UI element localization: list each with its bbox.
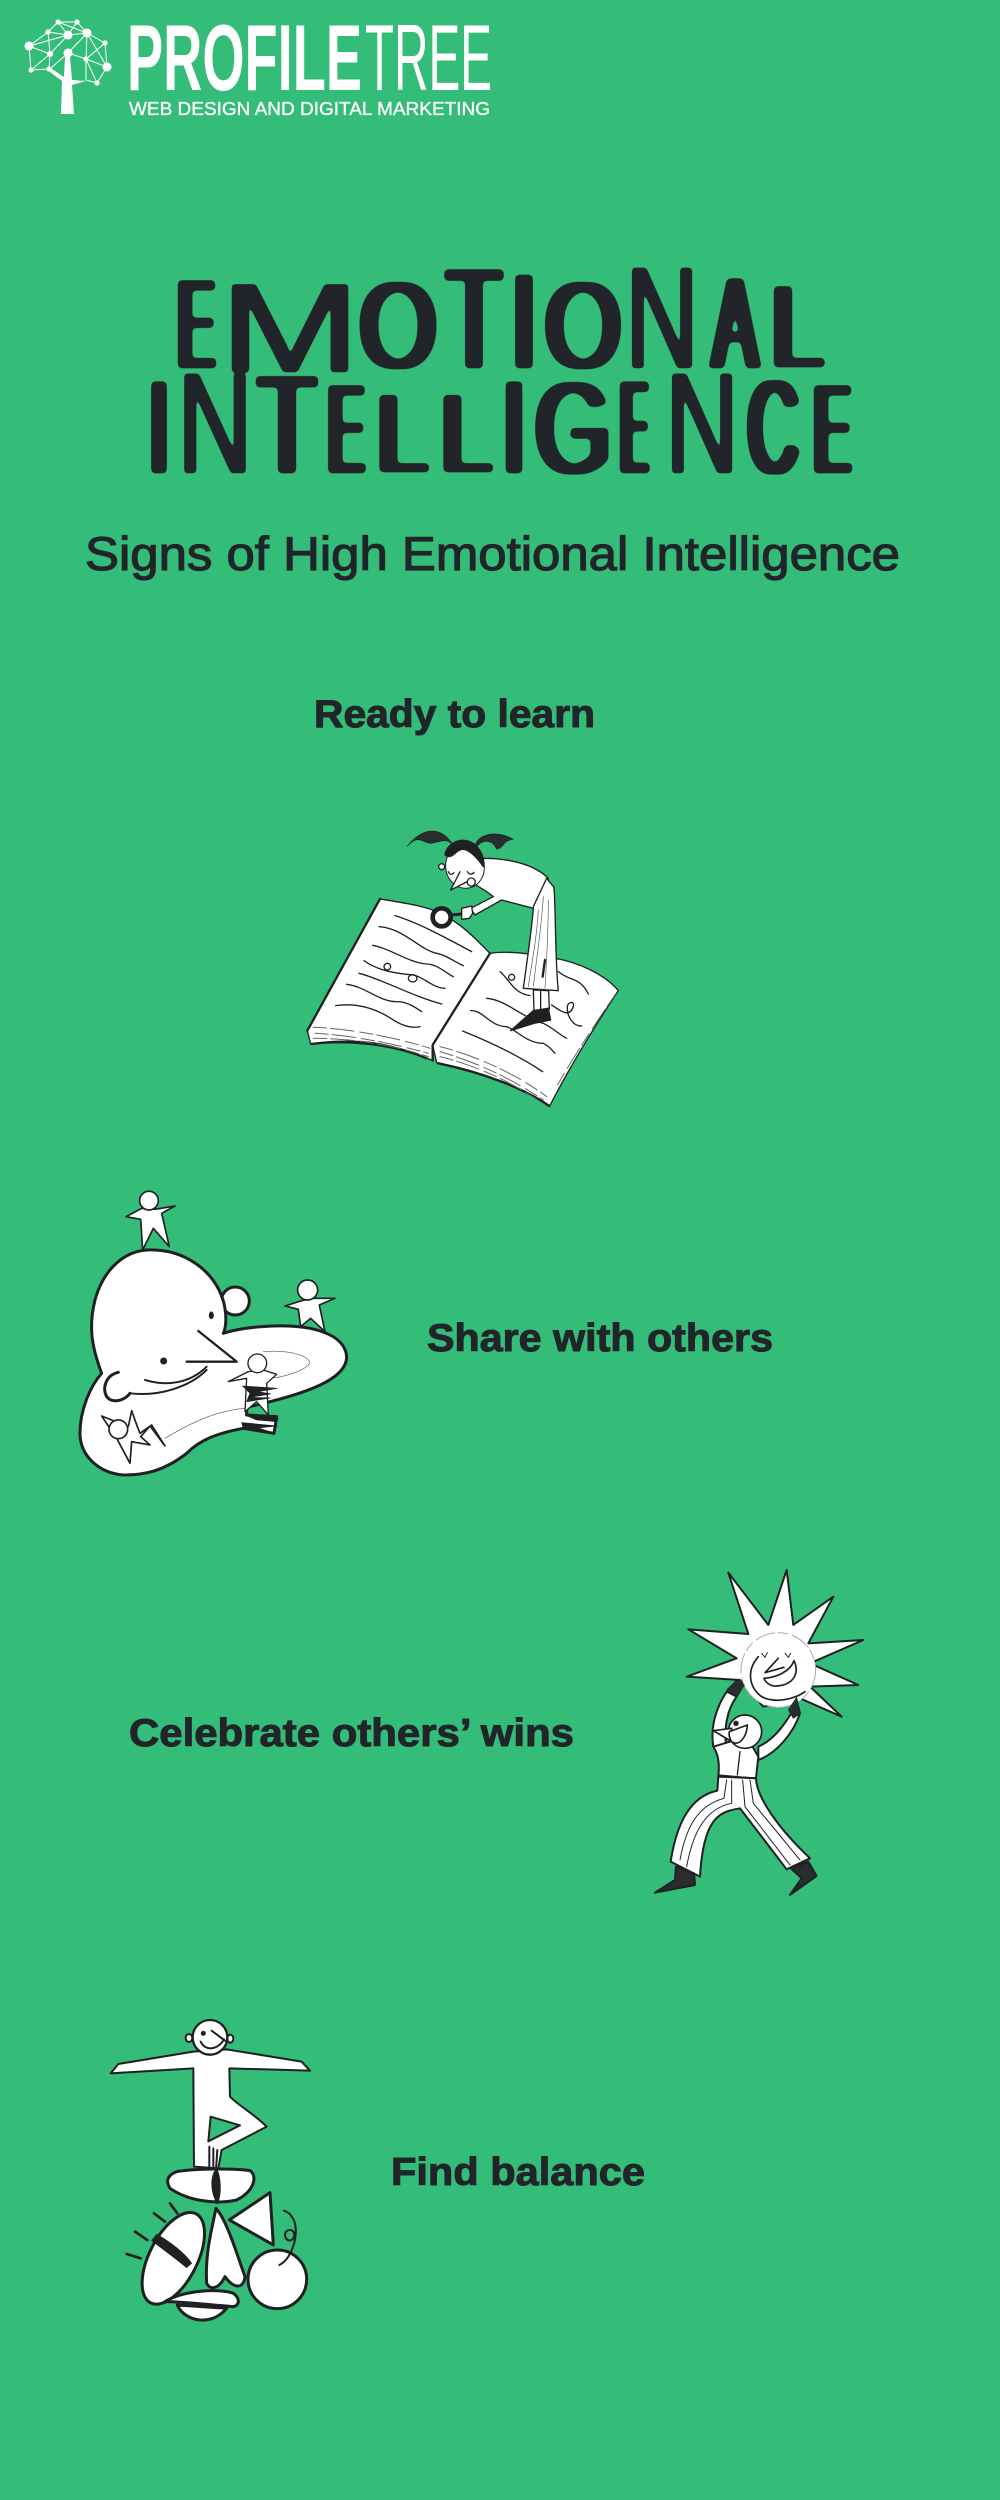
illustration: person balancing on stacked shapes [111,2020,310,2320]
subtitle: Signs of High Emotional Intelligence [85,527,900,580]
person: hands [727,1680,801,1718]
illustration: big figure holding small people [80,1191,347,1475]
small person: on head [126,1191,175,1250]
logo wordmark: profile: PROFILE [127,5,362,110]
girl: trousers [523,878,558,991]
title: Emotional Intelligence: N [665,343,739,504]
stone: circle with curl [248,2250,307,2309]
heading: find balance: Find balance [391,2151,645,2194]
title: Emotional Intelligence: G [535,356,611,501]
book: left page [307,899,490,1061]
person: trousers [671,1777,810,1877]
title: Emotional Intelligence: I [150,354,168,502]
title: Emotional Intelligence: C [748,354,798,502]
title: Emotional Intelligence: E [814,358,850,500]
icon: magnifying glass [433,908,451,926]
person: head [713,1715,762,1748]
figure: ear [221,1287,249,1315]
title: Emotional Intelligence: E [329,358,363,500]
title: Emotional Intelligence: L [377,371,427,496]
heading: ready to learn: Ready to learn [314,693,595,736]
person: arms [712,1692,800,1760]
person: shoes [655,1862,817,1895]
title: Emotional Intelligence: E [178,253,214,395]
title: Emotional Intelligence: A [713,251,757,396]
title: Emotional Intelligence: T [258,347,316,504]
title: Emotional Intelligence: M [220,257,360,399]
title: Emotional Intelligence [150,236,850,504]
illustration: girl reading a book with magnifying glass [307,831,618,1107]
heading: share with others: Share with others [427,1317,773,1360]
icon: network tree [24,19,112,114]
title: Emotional Intelligence: L [771,262,823,392]
illustration: person lifting a smiling sun [655,1570,863,1895]
title: Emotional Intelligence: N [177,342,253,504]
stone: tilted ellipse [129,2203,217,2314]
small person: in hand [228,1354,277,1415]
stone: flat oval [168,2169,254,2202]
person: body with bent leg [111,2049,310,2168]
title: Emotional Intelligence: N [625,236,699,399]
heading: celebrate others' wins: Celebrate others’ wins [129,1712,574,1755]
person: torso [713,1737,758,1778]
title: Emotional Intelligence: I [512,247,536,398]
book: right page [433,952,618,1107]
logo tagline: WEB DESIGN AND DIGITAL MARKETING [129,98,490,119]
title: Emotional Intelligence: I [504,353,524,501]
girl: torso and arm [471,858,548,915]
small person: on chest [102,1411,165,1463]
figure: body, head and arm [80,1250,347,1475]
stone: nose shape [206,2208,245,2288]
title: Emotional Intelligence: O [545,259,621,395]
book: page edges and text lines [307,899,615,1106]
person: head [186,2020,233,2055]
figure: face [105,1312,310,1438]
girl: head and face [442,842,488,891]
sun: face [741,1633,816,1707]
title: Emotional Intelligence: O [360,257,436,394]
girl: hair and pigtails [445,840,484,867]
title: Emotional Intelligence: T [447,239,501,399]
title: Emotional Intelligence: E [621,353,647,502]
logo wordmark: tree: TREE [365,5,492,110]
girl: legs and shoe [533,990,549,1011]
stone: triangle [229,2193,273,2245]
logo: ProfileTree [24,5,492,119]
stone: bowl and lid [177,2305,227,2320]
small person: on arm [285,1280,335,1332]
person: leg gap [208,2117,240,2141]
figure: fingers [242,1386,278,1433]
sun: rays [687,1570,863,1717]
title: Emotional Intelligence: L [441,371,491,496]
